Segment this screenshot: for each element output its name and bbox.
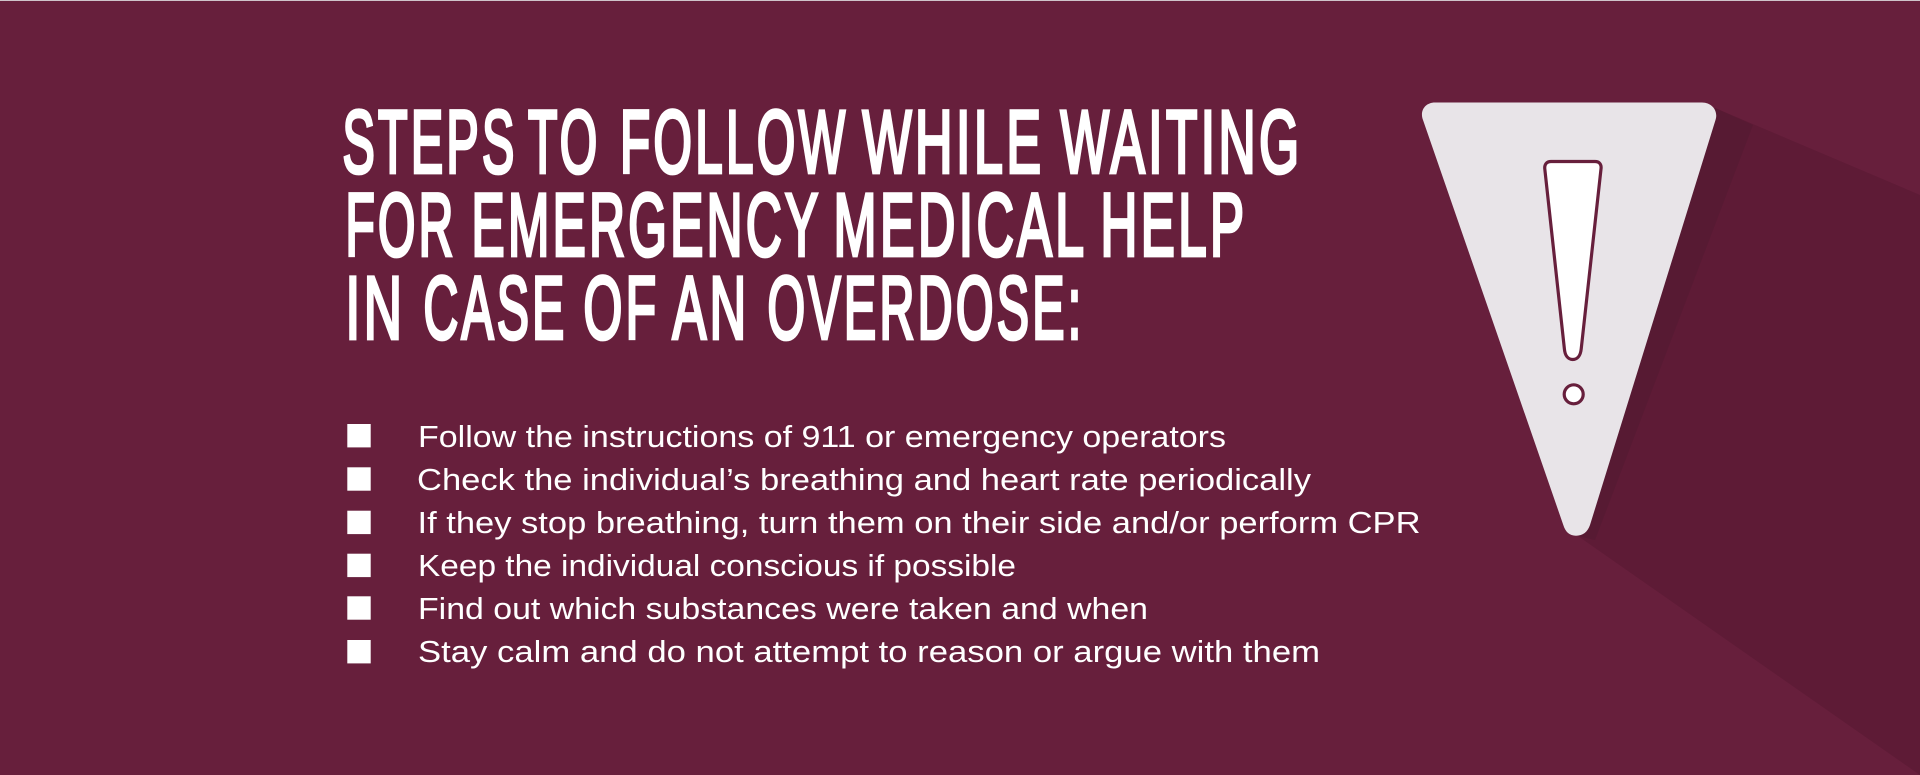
heading: FOR bbox=[346, 174, 456, 274]
heading: IN bbox=[346, 258, 406, 358]
long shadow of warning triangle bbox=[1578, 108, 1920, 775]
checklist of steps bbox=[347, 419, 1420, 669]
exclamation dot bbox=[1564, 385, 1583, 404]
heading: AN bbox=[672, 258, 750, 358]
step 1: Follow the instructions of 911 or emergency operators bbox=[418, 419, 1226, 454]
step 6: Stay calm and do not attempt to reason or argue with them bbox=[418, 634, 1320, 669]
heading bbox=[342, 92, 1302, 358]
step 2: Check the individual’s breathing and heart rate periodically bbox=[417, 462, 1312, 497]
heading: TO bbox=[528, 92, 600, 192]
heading: CASE bbox=[424, 258, 568, 358]
heading: STEPS bbox=[342, 92, 518, 192]
heading: WAITING bbox=[1060, 92, 1302, 192]
near shadow band of warning triangle bbox=[1578, 108, 1753, 540]
inverted triangle bbox=[1422, 102, 1716, 536]
step 4: Keep the individual conscious if possible bbox=[418, 548, 1016, 583]
heading: HELP bbox=[1100, 174, 1248, 274]
icon: warning triangle with exclamation mark bbox=[1422, 102, 1716, 536]
heading: EMERGENCY bbox=[472, 174, 822, 274]
heading: WHILE bbox=[862, 92, 1044, 192]
step 5: Find out which substances were taken and when bbox=[418, 591, 1148, 626]
heading: OF bbox=[584, 258, 660, 358]
exclamation bar bbox=[1545, 162, 1601, 360]
step 3: If they stop breathing, turn them on their side and/or perform CPR bbox=[418, 505, 1420, 540]
heading: OVERDOSE: bbox=[768, 258, 1084, 358]
heading: FOLLOW bbox=[620, 92, 848, 192]
heading: MEDICAL bbox=[834, 174, 1088, 274]
